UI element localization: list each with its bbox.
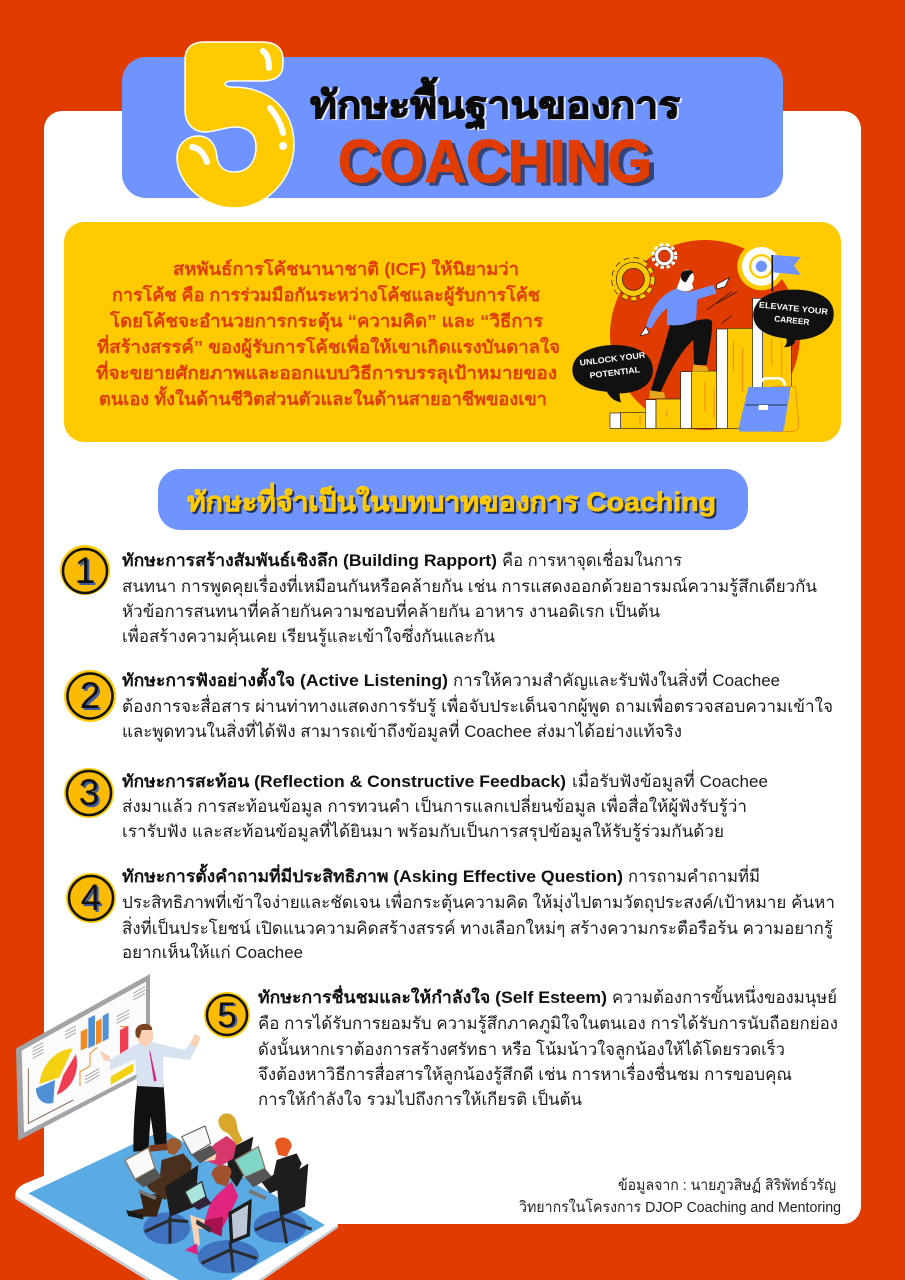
badge 1: 1	[75, 550, 95, 591]
text: active listening	[122, 667, 833, 742]
badge 4	[66, 873, 116, 923]
text: building rapport: สนทนา การพูดคุยเรื่องที่เหมือนกันหรือคล้ายกัน เช่น การแสดงออกด้วยอารมณ์ความรู้สึกเดียวกัน	[122, 574, 817, 597]
callout: unlock your potential: POTENTIAL	[589, 364, 641, 380]
badge 3: 3	[79, 772, 99, 813]
badge 3: 3	[81, 774, 101, 815]
icon: big number 5	[177, 42, 294, 208]
figure: seated man right	[235, 1137, 312, 1243]
skill 4	[66, 863, 835, 962]
text: self esteem: ทักษะการชื่นชมและให้กำลังใจ (Self Esteem)	[258, 985, 607, 1007]
skill 5	[204, 985, 838, 1109]
text: reflection: ส่งมาแล้ว การสะท้อนข้อมูล การทวนคำ เป็นการแลกเปลี่ยนข้อมูล เพื่อสื่อให้ผู้ฟังรับรู้ว่า	[122, 794, 747, 817]
skill 2	[64, 667, 833, 742]
text: active listening: และพูดทวนในสิ่งที่ได้ฟัง สามารถเข้าถึงข้อมูลที่ Coachee ส่งมาได้อย่างแท้จริง	[122, 719, 682, 742]
figure: presenter	[100, 1024, 201, 1152]
badge 2: 2	[80, 675, 100, 716]
text: self esteem: จึงต้องหาวิธีการสื่อสารให้ลูกน้องรู้สึกดี เช่น การหาเรื่องชื่นชม การขอบคุณ	[258, 1062, 792, 1085]
callout: unlock your potential: UNLOCK YOUR	[579, 350, 646, 368]
chair shadows	[143, 1211, 307, 1273]
text: self esteem	[258, 985, 838, 1109]
badge 2	[64, 670, 116, 722]
text: self esteem: คือ การได้รับการยอมรับ ความรู้สึกภาคภูมิใจในตนเอง การได้รับการนับถือยกย่อง	[258, 1013, 838, 1034]
text: building rapport	[122, 548, 817, 647]
chart: pie	[36, 1048, 77, 1104]
text: building rapport: ทักษะการสร้างสัมพันธ์เชิงลึก (Building Rapport)	[122, 550, 497, 570]
text: active listening: การให้ความสำคัญและรับฟังในสิ่งที่ Coachee	[453, 668, 780, 690]
skill 3	[64, 768, 768, 842]
text: reflection: เมื่อรับฟังข้อมูลที่ Coachee	[572, 769, 768, 792]
callout: elevate your career	[753, 290, 834, 347]
text: building rapport: หัวข้อการสนทนาที่คล้ายกันความชอบที่คล้ายกัน อาหาร งานอดิเรก เป็นต้น	[122, 599, 660, 621]
chart: bars	[81, 1013, 109, 1051]
text: reflection	[122, 769, 768, 842]
skill 1	[60, 545, 817, 647]
icon: briefcase	[739, 378, 799, 432]
text: building rapport: เพื่อสร้างความคุ้นเคย เรียนรู้และเข้าใจซึ่งกันและกัน	[122, 624, 495, 647]
text: reflection: ทักษะการสะท้อน (Reflection & Constructive Feedback)	[122, 772, 566, 791]
badge 4: 4	[81, 877, 101, 918]
heading pill: essential skills: ทักษะที่จำเป็นในบทบาทของการ Coaching	[189, 484, 718, 519]
text: reflection: เรารับฟัง และสะท้อนข้อมูลที่ได้ยินมา พร้อมกับเป็นการสรุปข้อมูลให้รับรู้ร่วมกันด้วย	[122, 819, 724, 842]
panel: title banner	[122, 42, 783, 208]
badge 3	[64, 768, 114, 818]
heading pill: essential skills: ทักษะที่จำเป็นในบทบาทของการ Coaching	[187, 482, 716, 517]
illustration: presenter and team on tablet	[15, 974, 338, 1280]
text block: ICF definition: การโค้ช คือ การร่วมมือกันระหว่างโค้ชและผู้รับการโค้ช	[112, 284, 540, 307]
panel: ICF definition	[64, 222, 841, 442]
text: asking effective question: ทักษะการตั้งคำถามที่มีประสิทธิภาพ (Asking Effective Question)	[122, 863, 623, 886]
figure: woman in pink foreground	[185, 1165, 257, 1272]
callout: elevate your career: CAREER	[774, 313, 810, 327]
text block: ICF definition	[96, 258, 560, 409]
badge 5	[204, 992, 250, 1038]
heading pill: essential skills	[158, 469, 748, 530]
text: asking effective question: สิ่งที่เป็นประโยชน์ เปิดแนวความคิดสร้างสรรค์ ทางเลือกใหม่ๆ สร้างความกระตือรือร้น ความอยากรู้	[122, 916, 833, 939]
illustration: career steps	[572, 240, 834, 432]
credit: ข้อมูลจาก : นายภูวสิษฏ์ สิริพัทธ์วรัญ	[618, 1177, 836, 1194]
title line 1: ทักษะพื้นฐานของการ	[310, 77, 681, 130]
badge 4: 4	[83, 879, 103, 920]
figure: woman with blonde hair	[182, 1113, 253, 1187]
icon: target and flag	[737, 242, 801, 292]
title line 1: ทักษะพื้นฐานของการ	[312, 78, 683, 131]
text block: ICF definition: โดยโค้ชจะอำนวยการกระตุ้น “ความคิด” และ “วิธีการ	[109, 310, 544, 332]
icon: gears	[616, 246, 674, 297]
text: self esteem: ความต้องการขั้นหนึ่งของมนุษย์	[612, 985, 837, 1008]
text: active listening: ทักษะการฟังอย่างตั้งใจ (Active Listening)	[122, 667, 448, 690]
badge 5: 5	[219, 997, 239, 1036]
figure: climbing man	[640, 270, 737, 398]
badge 2: 2	[82, 677, 102, 718]
presentation board	[16, 974, 150, 1141]
team seated at laptops	[125, 1113, 312, 1273]
text block: ICF definition: ที่สร้างสรรค์” ของผู้รับการโค้ชเพื่อให้เขาเกิดแรงบันดาลใจ	[97, 334, 560, 359]
presentation board and presenter	[16, 974, 201, 1152]
panel: white content card	[44, 111, 861, 1224]
text: self esteem: การให้กำลังใจ รวมไปถึงการให้เกียรติ เป็นต้น	[258, 1088, 582, 1109]
text: asking effective question: การถามคำถามที่มี	[628, 864, 760, 886]
text block: ICF definition: สหพันธ์การโค้ชนานาชาติ (ICF) ให้นิยามว่า	[173, 258, 519, 279]
text: building rapport: คือ การหาจุดเชื่อมในการ	[502, 548, 682, 571]
title line 2: COACHING: COACHING	[338, 128, 652, 195]
credit: วิทยากรในโครงการ DJOP Coaching and Mentoring	[518, 1198, 841, 1216]
text: self esteem: ดังนั้นหากเราต้องการสร้างศรัทธา หรือ โน้มน้าวใจลูกน้องให้ได้โดยรวดเร็ว	[258, 1037, 785, 1060]
badge 1: 1	[77, 552, 97, 593]
credit	[518, 1177, 841, 1216]
figure: seated man left	[125, 1138, 198, 1243]
badge 1	[60, 545, 110, 595]
tablet platform	[15, 1127, 338, 1280]
badge 5: 5	[217, 996, 237, 1035]
text: asking effective question: อยากเห็นให้แก่ Coachee	[122, 941, 303, 962]
text block: ICF definition: ที่จะขยายศักยภาพและออกแบบวิธีการบรรลุเป้าหมายของ	[96, 360, 557, 384]
text: active listening: ต้องการจะสื่อสาร ผ่านท่าทางแสดงการรับรู้ เพื่อจับประเด็นจากผู้พูด ถามเพื่อตรวจสอบความเข้าใจ	[122, 694, 833, 717]
callout: unlock your potential	[572, 345, 653, 402]
text: asking effective question	[122, 863, 835, 962]
title line 2: COACHING: COACHING	[341, 131, 657, 198]
callout: elevate your career: ELEVATE YOUR	[758, 299, 828, 317]
text: asking effective question: ประสิทธิภาพที่เข้าใจง่ายและชัดเจน เพื่อกระตุ้นความคิด ให้มุ่งไปตามวัตถุประสงค์/เป้าหมาย ค้นหา	[122, 890, 835, 913]
text block: ICF definition: ตนเอง ทั้งในด้านชีวิตส่วนตัวและในด้านสายอาชีพของเขา	[99, 386, 547, 409]
chart: rising steps	[610, 298, 791, 428]
